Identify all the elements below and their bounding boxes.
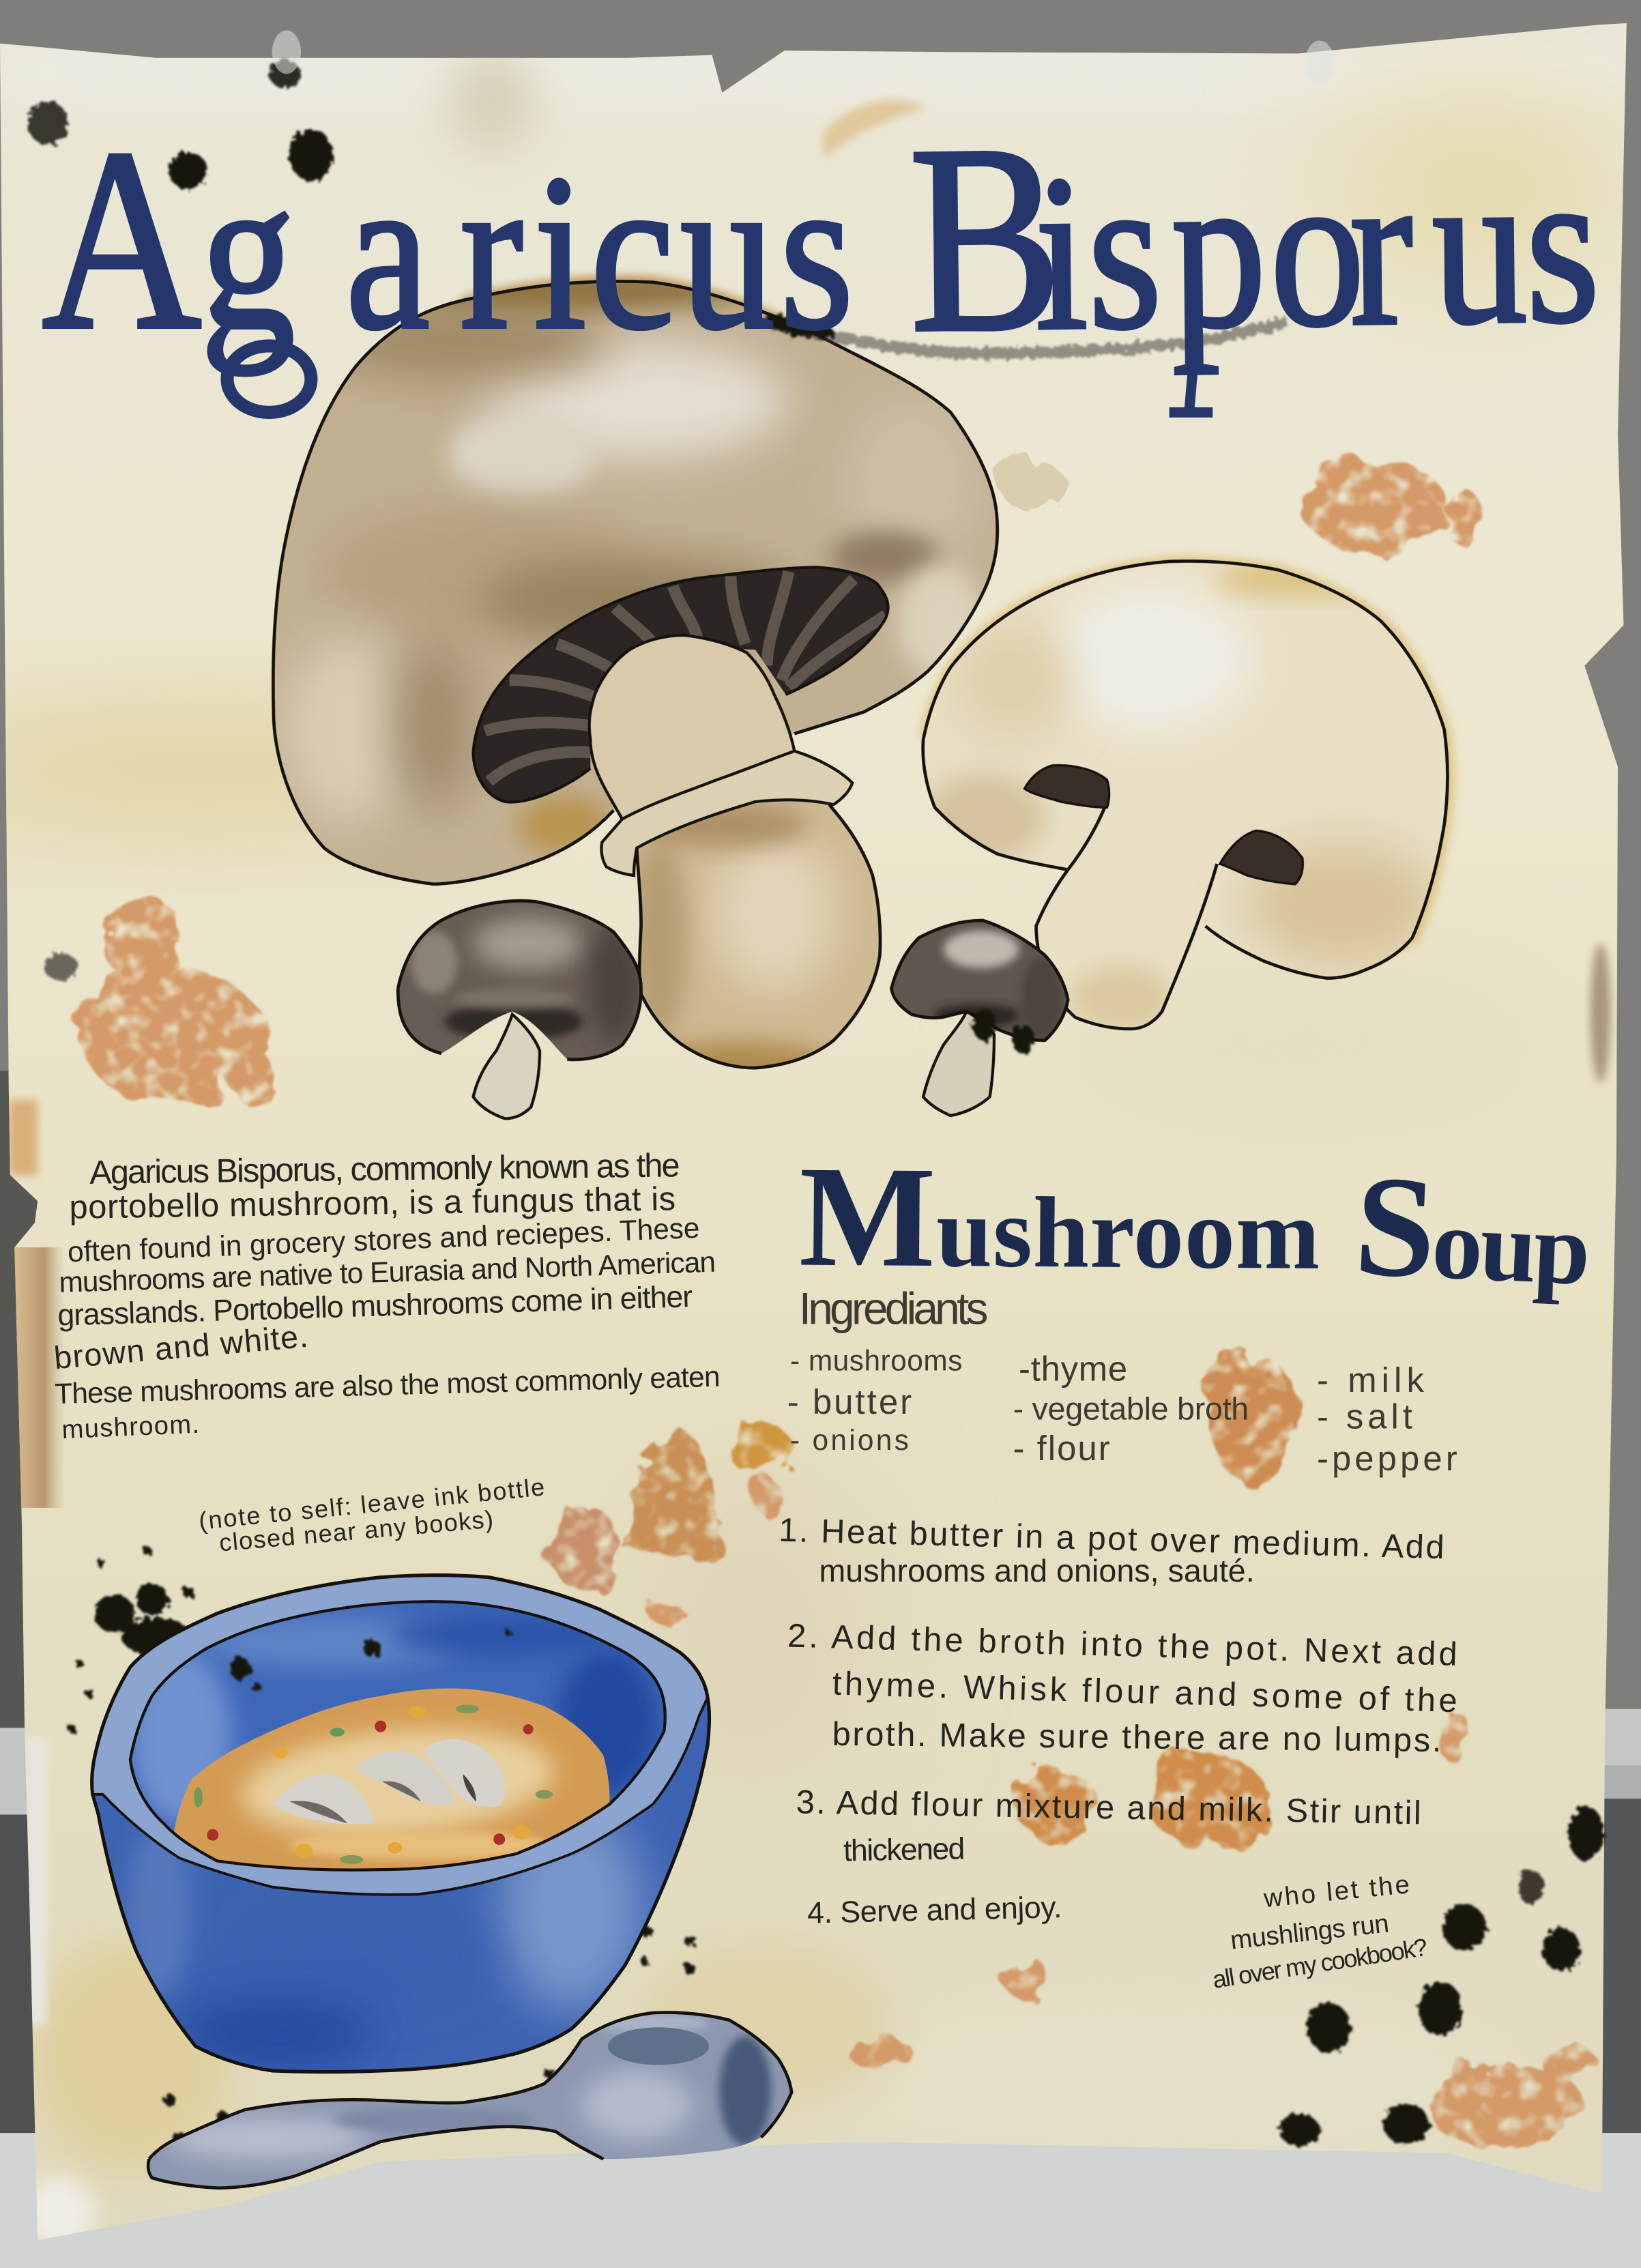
smudge streak [767,321,1288,353]
spoon hollow [608,2027,709,2065]
recipe step 1: 1. Heat butter in a pot over medium. Add [779,1512,1444,1566]
ingredients list column 3: - salt [1317,1397,1412,1436]
ingredients list column 1 [787,1344,962,1456]
recipe step 2: 2. Add the broth into the pot. Next add [787,1618,1457,1673]
bowl body [80,1570,716,2076]
gill left [1025,766,1109,807]
mushroom slices in soup [272,1739,505,1824]
illustration: small brown mushroom left [391,897,651,1118]
recipe step 3: 3. Add flour mixture and milk. Stir until [796,1784,1421,1831]
ingredients list column 3: -pepper [1317,1439,1457,1478]
recipe heading: Mushroom Soup [798,1136,1595,1315]
bowl rim [92,1575,708,1895]
soup [173,1688,609,1881]
charcoal smudge [760,310,1288,353]
paragraph: about the mushroom: portobello mushroom, is a fungus that is [69,1180,676,1226]
ink smudge [972,1008,1034,1053]
ingredients list column 1: - onions [790,1424,909,1456]
recipe step 3 [796,1784,1421,1867]
cap [391,897,651,1071]
cap [883,912,1071,1056]
stem upper [590,635,794,819]
ingredients heading: Ingrediants [799,1283,989,1334]
title [42,81,1601,412]
mushlings note: mushlings run [1229,1908,1391,1956]
paragraph: about the mushroom [53,1147,721,1444]
body [912,550,1462,1042]
recipe step 2: broth. Make sure there are no lumps. [832,1716,1442,1759]
title g descender [227,346,311,412]
ingredients list column 1: - mushrooms [790,1344,962,1376]
paragraph: about the mushroom: often found in grocery stores and reciepes. These [67,1212,700,1268]
ingredients list column 2: - vegetable broth [1013,1391,1249,1427]
ink drops in bowl [230,1631,512,1691]
paragraph: about the mushroom: brown and white. [53,1318,309,1376]
ingredients list column 3: - milk [1317,1361,1424,1399]
illustration: spoon [137,2004,803,2200]
recipe step 1: mushrooms and onions, sauté. [819,1553,1255,1588]
gold halo [919,557,1454,955]
ingredients list column 2 [1013,1349,1249,1468]
paragraph: about the mushroom: mushroom. [61,1410,200,1444]
word: Soup: Soup [1352,1145,1595,1315]
gill right [1220,830,1303,884]
mushlings note: who let the [1262,1870,1411,1913]
title p descender [1170,340,1212,412]
coffee stains [78,460,1599,2146]
mushlings note [1210,1870,1429,1994]
soup herbs [194,1704,553,1864]
illustration: sliced mushroom [912,550,1462,1042]
mushlings note: all over my cookbook? [1210,1933,1429,1994]
illustration: large mushroom [261,269,1013,1094]
illustration: small brown mushroom right [883,912,1071,1116]
recipe step 4: 4. Serve and enjoy. [807,1891,1062,1930]
ingredients list column 1: - butter [787,1382,912,1421]
ring [601,751,852,875]
cap gold halo [434,276,819,376]
recipe step 2: thyme. Whisk flour and some of the [832,1666,1458,1719]
stem [923,1011,994,1116]
ingredients list column 2: -thyme [1019,1349,1127,1388]
recipe step 3: thickened [843,1832,965,1867]
spoon shape [137,2004,803,2200]
pale water stain [1000,459,1064,511]
paragraph: about the mushroom: Agaricus Bisporus, commonly known as the [89,1147,680,1191]
title word: Bisporus: Bisporus [907,81,1601,389]
paragraph: about the mushroom: mushrooms are native to Eurasia and North American [59,1246,716,1298]
ingredients list column 2: - flour [1013,1429,1110,1468]
push pins [272,31,1334,84]
note to self: (note to self: leave ink bottle [197,1472,546,1535]
stem lower bulb [622,789,897,1094]
paragraph: about the mushroom: grasslands. Portobello mushrooms come in either [57,1280,693,1333]
paragraph: about the mushroom: These mushrooms are also the most commonly eaten [55,1361,721,1410]
smudge blob [760,310,837,343]
cap [261,269,1013,897]
recipe step 2 [787,1618,1458,1759]
stem [474,1015,540,1118]
ingredients list column 3 [1317,1361,1457,1478]
bowl interior [123,1592,673,1903]
note to self: closed near any books) [218,1505,494,1557]
title word: Agaricus: Agaricus [42,95,854,383]
illustration: blue soup bowl [80,1570,716,2076]
gills [463,557,897,817]
word: Mushroom: Mushroom [798,1136,1320,1300]
